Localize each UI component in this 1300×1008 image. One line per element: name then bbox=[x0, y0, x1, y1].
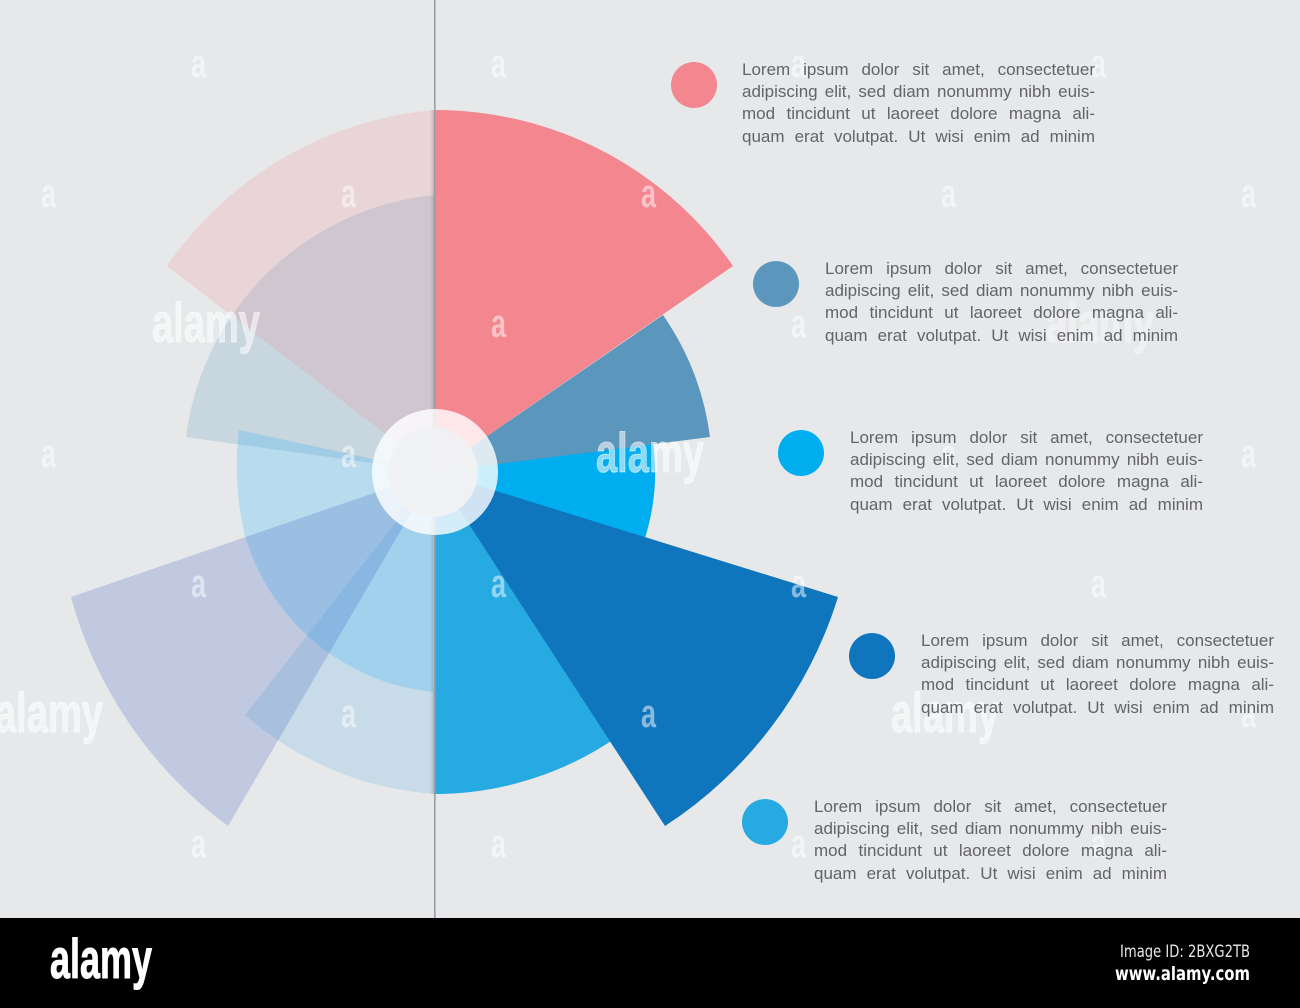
mirrored pink sector bbox=[167, 110, 435, 472]
watermark letters: a bbox=[791, 302, 807, 346]
watermark letters: a bbox=[791, 42, 807, 86]
footer logo: alamy bbox=[50, 927, 152, 990]
watermark letters: a bbox=[1241, 172, 1257, 216]
text block 3: Lorem ipsum dolor sit amet, consectetuer bbox=[850, 428, 1203, 447]
website: www.alamy.com bbox=[1115, 963, 1250, 985]
text block 5: quam erat volutpat. Ut wisi enim ad minim bbox=[814, 864, 1167, 883]
watermark letters: a bbox=[491, 822, 507, 866]
watermark letters: a bbox=[41, 432, 57, 476]
text block 2: mod tincidunt ut laoreet dolore magna ali- bbox=[825, 303, 1178, 322]
vertical axis line bbox=[434, 0, 436, 918]
watermark letters: a bbox=[941, 172, 957, 216]
text block 5: adipiscing elit, sed diam nonummy nibh euis- bbox=[814, 819, 1167, 838]
watermark letters: a bbox=[1241, 692, 1257, 736]
legend dot: light blue bbox=[742, 799, 788, 845]
watermark letters: a bbox=[1091, 822, 1107, 866]
hub inner disc bbox=[388, 427, 478, 517]
pink sector bbox=[435, 110, 733, 472]
text block 5: Lorem ipsum dolor sit amet, consectetuer bbox=[814, 797, 1167, 816]
watermark letters: a bbox=[41, 172, 57, 216]
watermark letters: a bbox=[641, 692, 657, 736]
text block 1: adipiscing elit, sed diam nonummy nibh euis- bbox=[742, 82, 1095, 101]
mirrored dark blue sector bbox=[71, 472, 435, 826]
text block 5: mod tincidunt ut laoreet dolore magna ali- bbox=[814, 841, 1167, 860]
legend dot: dark blue bbox=[849, 633, 895, 679]
watermark letters bbox=[41, 42, 1257, 866]
text block 2 bbox=[825, 259, 1178, 345]
light blue sector bbox=[435, 472, 620, 794]
footer bar bbox=[0, 918, 1300, 1008]
watermark logos: alamy bbox=[1046, 291, 1154, 354]
watermark letters: a bbox=[191, 822, 207, 866]
text block 5 bbox=[814, 797, 1167, 883]
watermark letters: a bbox=[641, 172, 657, 216]
text block 1: Lorem ipsum dolor sit amet, consectetuer bbox=[742, 60, 1095, 79]
text block 2: quam erat volutpat. Ut wisi enim ad minim bbox=[825, 326, 1178, 345]
watermark letters: a bbox=[1091, 562, 1107, 606]
text block 2: Lorem ipsum dolor sit amet, consectetuer bbox=[825, 259, 1178, 278]
hub outer ring bbox=[372, 409, 498, 535]
chart sectors bbox=[435, 110, 838, 826]
legend dot: bright blue bbox=[778, 430, 824, 476]
watermark letters: a bbox=[491, 562, 507, 606]
watermark letters: a bbox=[1091, 42, 1107, 86]
text block 1: mod tincidunt ut laoreet dolore magna ali- bbox=[742, 104, 1095, 123]
text block 4: Lorem ipsum dolor sit amet, consectetuer bbox=[921, 631, 1274, 650]
text block 4: mod tincidunt ut laoreet dolore magna ali- bbox=[921, 675, 1274, 694]
bright blue sector bbox=[435, 430, 655, 538]
text block 4 bbox=[921, 631, 1274, 717]
mirrored light blue sector bbox=[245, 472, 435, 794]
watermark letters: a bbox=[491, 302, 507, 346]
watermark logos: alamy bbox=[596, 421, 704, 484]
watermark letters: a bbox=[1241, 432, 1257, 476]
watermark letters: a bbox=[341, 692, 357, 736]
watermark letters: a bbox=[341, 432, 357, 476]
steel blue sector bbox=[435, 315, 710, 472]
dark blue sector bbox=[435, 472, 838, 826]
watermark letters: a bbox=[791, 822, 807, 866]
image id: Image ID: 2BXG2TB bbox=[1120, 942, 1250, 962]
text block 1: quam erat volutpat. Ut wisi enim ad minim bbox=[742, 127, 1095, 146]
text block 4: adipiscing elit, sed diam nonummy nibh euis- bbox=[921, 653, 1274, 672]
text block 3: adipiscing elit, sed diam nonummy nibh euis- bbox=[850, 450, 1203, 469]
watermark letters: a bbox=[341, 172, 357, 216]
centre hub bbox=[372, 409, 498, 535]
watermark letters: a bbox=[941, 432, 957, 476]
text block 3 bbox=[850, 428, 1203, 514]
watermark letters: a bbox=[491, 42, 507, 86]
fold shadow bbox=[430, 110, 434, 794]
mirrored sectors bbox=[71, 110, 435, 826]
text block 1 bbox=[742, 60, 1095, 146]
watermark letters: a bbox=[191, 562, 207, 606]
mirrored bright blue sector bbox=[237, 430, 433, 692]
watermark logos: alamy bbox=[891, 681, 999, 744]
watermark letters: a bbox=[191, 42, 207, 86]
text block 3: quam erat volutpat. Ut wisi enim ad minim bbox=[850, 495, 1203, 514]
watermark letters: a bbox=[791, 562, 807, 606]
watermark logos bbox=[0, 291, 1154, 744]
mirrored steel blue sector bbox=[186, 195, 435, 472]
legend dot: steel blue bbox=[753, 261, 799, 307]
text block 2: adipiscing elit, sed diam nonummy nibh euis- bbox=[825, 281, 1178, 300]
text block 3: mod tincidunt ut laoreet dolore magna ali- bbox=[850, 472, 1203, 491]
watermark logos: alamy bbox=[152, 291, 260, 354]
text block 4: quam erat volutpat. Ut wisi enim ad minim bbox=[921, 698, 1274, 717]
legend dot: pink bbox=[671, 62, 717, 108]
